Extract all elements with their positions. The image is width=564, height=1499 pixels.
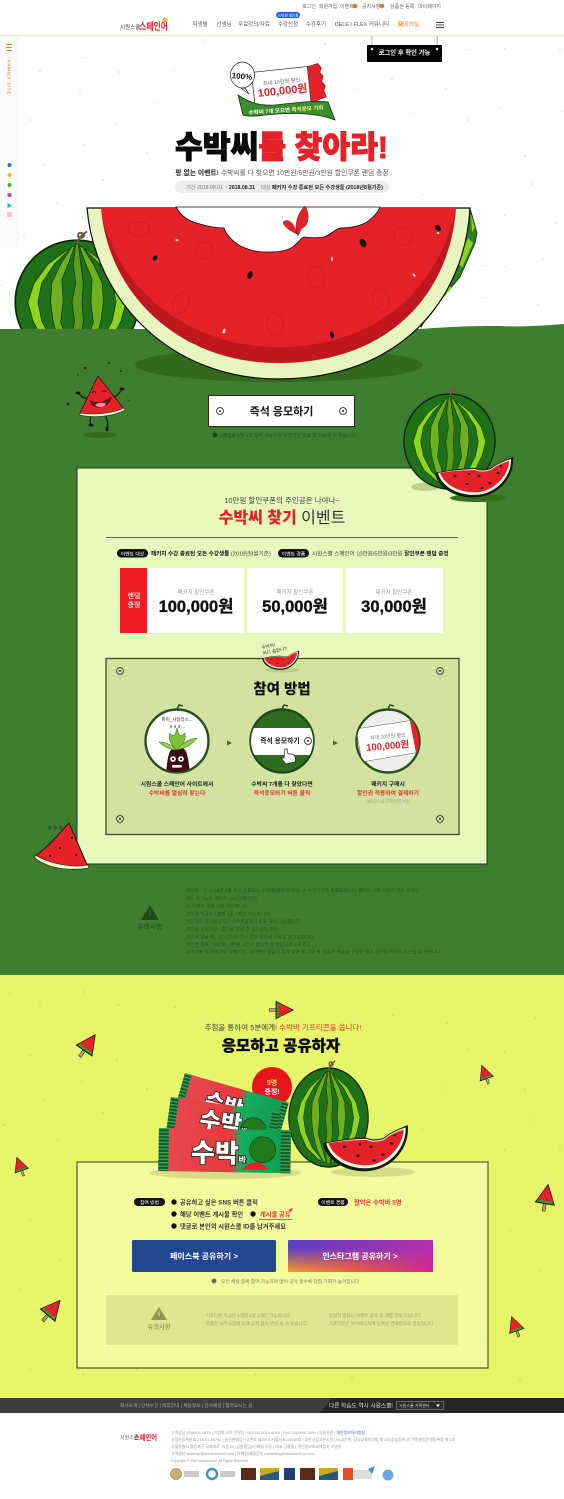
coupon: 100,000: 패키지 할인쿠폰 — [178, 588, 214, 596]
family site sidebar — [0, 37, 19, 248]
navigation: 무료강의/자료 — [238, 20, 270, 28]
notes: · ID 무한과 중복 사용 가능합니다. — [183, 902, 249, 910]
button note: 1계정당 1일 1회 참여 가능하며 수강기간 종료 후 사용할 수 있습니다. — [220, 432, 357, 439]
step 3 — [356, 705, 424, 772]
step 3 caption: 할인권 적용하여 결제하기 — [357, 789, 419, 797]
button: instagram share: 인스타그램 공유하기 > — [322, 1251, 398, 1261]
button: instant entry: 즉석 응모하기 — [250, 404, 313, 418]
how-to heading: 참여 방법 — [253, 680, 311, 698]
period and target pill: 대상 패키지 수강 종료된 모든 수강생들 (2018년8월기준) — [261, 183, 383, 191]
navigation: 수강후기 — [306, 20, 326, 28]
event tagline: 10만원 할인쿠폰의 주인공은 나야나~ — [224, 495, 340, 505]
coupon: 30,000: 패키지 할인쿠폰 — [376, 588, 412, 596]
period and target pill: 기간 2018.08.01 ~ 2018.08.31 — [186, 183, 255, 191]
step 3 caption: 패키지 구매시 — [371, 780, 405, 788]
watermelon and slice: share section — [289, 1061, 408, 1171]
shadows under products — [149, 1167, 301, 1179]
notes: · 할인권 발급 후, 7(7시간)이 지난 경우 할인권 사용은 불가능합니다. — [183, 934, 315, 940]
nav divider — [0, 35, 564, 36]
top utility links: 회원가입 — [319, 3, 337, 10]
notes: · 적용 불가능한 패키지 (355장패키지) — [183, 895, 257, 902]
bite — [176, 207, 380, 252]
notes: · 취약계층 및 부정기입 금액기입, 개인정보 불일치 집계 발화 후 기입 등 할롱된 경로로 구입한 경우 할인권 지급이 취소될 수 있습니다. — [183, 948, 442, 956]
navigation: 수강신청 — [278, 20, 298, 28]
share instructions: 참여 방법 — [140, 1199, 159, 1206]
share reward — [318, 1198, 402, 1206]
subtitle: 팡 없는 이벤트! 수박씨를 다 찾으면 10만원/5만원/3만원 할인쿠폰 랜덤 증정 — [175, 168, 389, 177]
panel: how to participate — [106, 641, 459, 834]
share note — [212, 1278, 360, 1285]
mini slice with note — [261, 641, 300, 672]
coupon: 100,000 — [147, 568, 244, 633]
share instructions: 게시물 공유 — [260, 1210, 291, 1218]
coupon: random gift tag: 증정 — [128, 600, 140, 609]
step 2 — [245, 705, 319, 772]
warning icon: 유의사항 — [137, 922, 163, 931]
logo: 스페인어 — [139, 20, 168, 33]
ticket badge: 100,000원: 100,000원 — [257, 81, 308, 100]
product bars: watermelon ice pops: 수박바 — [198, 1106, 250, 1139]
caution icon: 유의사항 — [147, 1322, 171, 1331]
product bars: watermelon ice pops: 수박바 — [191, 1138, 247, 1169]
event heading: 수박씨 찾기 이벤트 — [219, 509, 345, 527]
badge: 5 winners: 5명 — [267, 1078, 277, 1087]
footer text: Copyright © 2010 siwonschool. All Rights Reserved. — [171, 1459, 249, 1463]
rind — [87, 208, 470, 379]
navigation: 학생별 — [192, 20, 208, 28]
hanging login notice — [367, 36, 442, 62]
big slice shadow — [135, 348, 423, 382]
share heading: 응모하고 공유하자 — [222, 1037, 340, 1055]
navigation: 선생님 — [216, 20, 232, 28]
event reward — [278, 549, 449, 558]
caution icon — [147, 1307, 171, 1331]
arrow — [333, 740, 338, 746]
background: lime section — [0, 975, 564, 1398]
navigation: DELE / FLEX — [335, 22, 368, 28]
speech bubble: 100%: 100% — [231, 71, 253, 82]
popsicle decorations — [10, 1002, 558, 1339]
navigation: 10만원 할인중 — [278, 13, 299, 18]
mini slice with note: 어디 숨었니? — [262, 645, 288, 657]
step 3 caption: (패키지 내 구매안된 7일) — [366, 798, 411, 805]
event reward: 시원스쿨 스페인어 10만원/5만원/3만원 할인쿠폰 랜덤 증정 — [312, 550, 449, 558]
logo — [120, 18, 168, 33]
navigation: 내강의실 — [399, 20, 419, 28]
footer logo: 스페인어 — [134, 1432, 157, 1442]
button: instagram share — [288, 1240, 433, 1272]
sliced watermelon sitting on panel corner — [35, 823, 89, 869]
title: 수박씨를 찾아라! — [175, 130, 388, 165]
footer text: 고객상담 02)6409-0878 | 기업회 교육 컨설팅 02)2042-2014-6054 | FAX 02)3496-1599 | 이용약관 | 개인정보처리방침 — [171, 1430, 365, 1435]
dotted seed outlines — [127, 221, 412, 336]
sliced watermelon sitting on panel corner: ㅎㅎㅎ — [47, 826, 64, 832]
step 2 caption: 즉석응모하기 버튼 클릭 — [254, 789, 310, 797]
footer text: 서울특별시 영등포구 국회대로 76길 22 (공항빌딩)/이메일 이용 | 대표 강홍철 | 개인정보보호책임자 조영철 — [171, 1444, 342, 1449]
step 1 caption — [141, 780, 213, 797]
panel: share — [77, 1162, 488, 1368]
caution notes: · 당첨자 발표는 이벤트 종료 후 개별 연락 드립니다. — [326, 1312, 422, 1319]
footer logo — [120, 1432, 157, 1442]
badge: 5 winners — [252, 1067, 292, 1107]
share instructions: 공유하고 싶은 SNS 버튼 클릭 — [180, 1198, 258, 1206]
share instructions — [134, 1198, 293, 1230]
mini slice with note: 수박씨! — [261, 641, 276, 651]
caution notes: · 기프티콘 지급은 1계정 1일 1매만 가능합니다. — [203, 1312, 291, 1319]
logo: 시원스쿨 — [120, 23, 140, 31]
button: facebook share: 페이스북 공유하기 > — [170, 1251, 238, 1261]
caution notes: · 경품은 내부사정에 의해 공지 없이 변경 될 수 있습니다. — [203, 1320, 308, 1327]
coupon: 30,000: 30,000원 — [361, 597, 427, 616]
footer text — [171, 1430, 456, 1463]
left whole watermelon — [15, 231, 139, 364]
background speckles: hero — [1, 39, 564, 306]
icon: hamburger menu — [436, 22, 444, 28]
footer bar — [0, 1398, 564, 1413]
step 2 caption: 수박씨 7개를 다 찾았다면 — [251, 780, 313, 788]
panel: seed event — [77, 468, 487, 864]
navigation: 커뮤니티 — [369, 20, 389, 28]
top utility links: 상품권 등록 — [390, 3, 415, 10]
footer bar: 시원스쿨 가족센터 — [399, 1402, 430, 1408]
navigation — [192, 12, 419, 28]
panel: share cautions — [106, 1295, 458, 1345]
coupon: 50,000: 50,000원 — [262, 597, 328, 616]
step 2: 즉석 응모하기 — [260, 736, 300, 745]
back rind — [400, 208, 477, 327]
step 1 caption: 시원스쿨 스페인어 사이트에서 — [141, 780, 213, 788]
flesh — [101, 208, 456, 347]
step 3: 최대 10만원 할인 — [370, 731, 406, 742]
dark flesh band — [101, 208, 456, 363]
hanging login notice: 로그인 후 확인 가능 — [379, 48, 431, 56]
top utility links — [302, 3, 441, 10]
share heading tagline: 추첨을 통하여 5분에게! 수박바 기프티콘을 쏩니다! — [205, 1022, 361, 1032]
right watermelon with slice — [404, 387, 513, 502]
event target: 이벤트 대상 — [121, 550, 145, 557]
share instructions: 댓글로 본인의 시원스쿨 ID를 남겨주세요 — [180, 1222, 286, 1230]
share reward: 잘익은 수박바 5명 — [354, 1198, 402, 1206]
step 3 caption — [357, 780, 419, 805]
badge: 5 winners: 증정! — [264, 1087, 280, 1096]
notes: · 할인권 지급은 1계정 1일 1매만 가능합니다. — [183, 910, 270, 918]
step 1 caption: 수박씨를 열심히 찾는다 — [149, 789, 206, 797]
pale seeds — [176, 232, 439, 334]
ticket badge: 100,000원 — [230, 62, 335, 120]
event target: 패키지 수강 종료된 모든 수강생들 (2018년8월기준) — [151, 550, 271, 558]
juice drops — [296, 206, 308, 236]
step 1: ㅎㅎㅎ... — [169, 724, 185, 729]
background speckles: lime section — [3, 991, 561, 1381]
product bars: watermelon ice pops: 수박 — [202, 1089, 245, 1122]
ribbon: 수박씨 7개 모으면 즉석응모 기회 — [248, 103, 324, 117]
footer logo: 시원스쿨 — [120, 1434, 139, 1441]
event reward: 이벤트 경품 — [282, 550, 306, 557]
green ground — [0, 324, 564, 975]
notes: · 할인권은 마이페이지 > 내쿠폰함에서 바로 확인 가능합니다. — [183, 918, 301, 925]
step 2 caption — [251, 780, 313, 797]
arrow — [227, 740, 232, 746]
big watermelon slice — [87, 206, 477, 382]
footer certification badges — [170, 1466, 394, 1480]
footer text: 사업자등록번호 214-87-89792 | 통신판매업신고번호 제2014-서울서초-01083호 | 출판사업고유시설 (시)교문화, 강남교육지원청 제 4호(강남청록)의 학원설립운영등록증 제 1호 — [171, 1437, 456, 1442]
caution notes — [203, 1312, 434, 1327]
notes: · 할인권 유효기간 : 할인권 발급 후 7(7시간) 까지 — [183, 926, 278, 932]
button note — [212, 432, 357, 439]
button: facebook share — [132, 1240, 276, 1272]
coupon: 30,000 — [346, 568, 443, 633]
notes — [183, 887, 442, 956]
black seeds — [152, 224, 442, 339]
coupon: 50,000: 패키지 할인쿠폰 — [277, 588, 313, 596]
footer bar: 다른 학습도 역시 시원스쿨! — [329, 1402, 393, 1410]
footer text: 고객센터 siwonsp@siwonschool.com | 마케팅/제휴문의 marketing@siwonschool.com — [171, 1451, 315, 1456]
step 3: 100,000원 — [366, 738, 410, 754]
coupon: 100,000: 100,000원 — [159, 597, 233, 616]
notes: · 할인권 종류 : 10만원, 5만원, 3만원 할인권 중 랜덤으로 1개 제공 — [183, 941, 311, 948]
family site sidebar: FAMILY SITE — [6, 60, 12, 95]
button: instant entry — [208, 396, 354, 426]
step 1 — [146, 705, 208, 775]
footer bar: 회사소개 | 단체수강 | 제휴안내 | 채용정보 | 강사채용 | 찾아오시는 길 — [120, 1402, 253, 1409]
top utility links: 마이페이지 — [418, 3, 441, 10]
step 1: 파이_사일러스... — [161, 716, 193, 723]
notes: · 대상자 : ① 2018년 8월 수강 종료되는 수강생(패키지 이상) ② 수강기간은 종료되었으나 패키지 구매 이력이 있는 수강생 — [183, 887, 419, 894]
share reward: 이벤트 경품 — [321, 1199, 345, 1206]
share note: 모든 채널 중복 참여 가능하며 많이 공유 할수록 당첨 기회가 높아집니다 — [221, 1278, 360, 1285]
caution notes: · 기프티콘은 마이페이지에 등록된 연락번호로 발송됩니다. — [326, 1320, 434, 1327]
coupon: random gift tag — [120, 568, 147, 633]
product bars: watermelon ice pops — [158, 1073, 291, 1173]
warning icon — [137, 905, 163, 931]
background: white hero — [0, 0, 564, 340]
period and target pill — [175, 181, 389, 193]
top utility links: 공지사항 — [362, 3, 381, 10]
coupon: 50,000 — [247, 568, 343, 633]
event target — [117, 549, 271, 558]
coupon: random gift tag: 랜덤 — [128, 591, 140, 600]
top utility links: 로그인 — [302, 3, 316, 10]
top utility links: 이벤트 — [340, 3, 354, 10]
share instructions: 해당 이벤트 게시물 확인 — [180, 1210, 243, 1218]
character: dancing watermelon — [67, 362, 130, 438]
ticket badge: 100,000원: 최대 10만원 할인 — [263, 75, 301, 87]
